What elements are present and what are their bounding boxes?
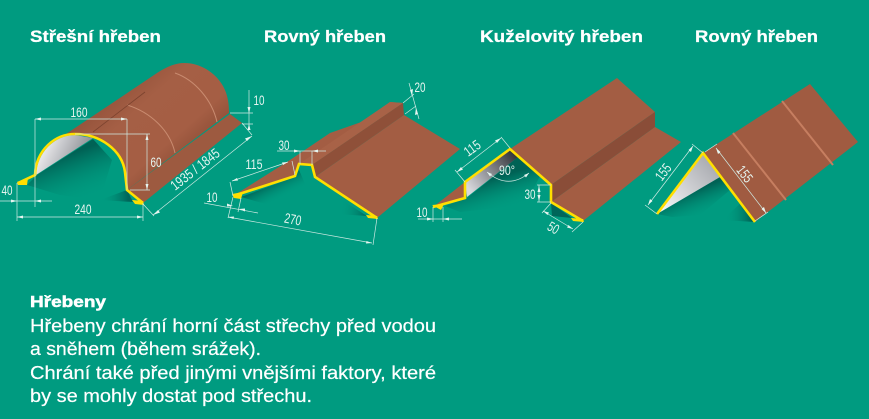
yellow profile — [433, 149, 583, 221]
panel: střešní hřeben diagram — [0, 63, 265, 221]
arrowheads — [648, 146, 766, 213]
yellow profile — [657, 153, 755, 222]
panel: kuželovitý hřeben diagram: 10 — [416, 204, 428, 220]
panel: rovný hřeben diagram 2: 155 — [733, 162, 757, 186]
left wedge — [433, 182, 465, 207]
ground shadow — [445, 157, 540, 212]
panel: střešní hřeben diagram: 240 — [74, 201, 92, 217]
ground shadow — [241, 170, 306, 206]
flange — [551, 127, 681, 221]
body line 1: Hřebeny chrání horní část střechy před vodou — [30, 316, 436, 336]
riser — [551, 112, 655, 202]
panel: střešní hřeben diagram: 10 — [254, 92, 265, 108]
left slope — [233, 102, 403, 196]
ridge side — [312, 103, 404, 177]
dimension lines — [645, 144, 768, 221]
heading: Střešní hřeben: Střešní hřeben — [30, 27, 161, 46]
panel: rovný hřeben diagram: 115 — [246, 156, 263, 172]
labels: 30 — [278, 137, 290, 153]
right slope — [315, 115, 460, 218]
ground shadow — [27, 139, 112, 200]
labels: 155 — [652, 160, 675, 184]
right foot shadow — [722, 203, 755, 222]
profile feet — [232, 192, 378, 219]
panel: střešní hřeben diagram: 60 — [150, 154, 162, 170]
cylinder body — [66, 63, 229, 190]
foot shadow — [100, 190, 133, 202]
yellow profile — [18, 134, 143, 203]
profile feet — [432, 204, 584, 222]
arrowheads — [427, 138, 573, 229]
foot shadow — [551, 203, 572, 218]
panel: kuželovitý hřeben diagram — [416, 78, 681, 237]
text block: Hřebeny description — [30, 294, 436, 406]
panel: rovný hřeben diagram: 270 — [283, 210, 303, 229]
body line 3: Chrání také před jinými vnějšími faktory, které — [30, 363, 436, 383]
subheading: Hřebeny — [30, 294, 106, 311]
flange — [127, 114, 242, 203]
panel: kuželovitý hřeben diagram: 90° — [499, 162, 515, 178]
panel: kuželovitý hřeben diagram: 50 — [545, 218, 562, 237]
arrowheads — [227, 89, 418, 244]
panel: rovný hřeben diagram: 20 — [414, 79, 426, 95]
arrowheads — [11, 107, 252, 218]
labels: 115 — [460, 136, 484, 159]
panel: střešní hřeben diagram: 40 — [2, 182, 13, 198]
dimension lines — [204, 83, 419, 245]
heading: Kuželovitý hřeben: Kuželovitý hřeben — [480, 27, 643, 46]
ribs — [127, 73, 217, 153]
heading: Rovný hřeben 2: Rovný hřeben — [695, 27, 818, 46]
profile feet — [17, 178, 144, 205]
panel: rovný hřeben diagram 2 — [645, 84, 858, 222]
heading: Rovný hřeben: Rovný hřeben — [264, 27, 386, 46]
dimension lines — [0, 90, 253, 221]
ridge seam — [93, 92, 145, 132]
interior — [465, 149, 518, 197]
body line 4: by se mohly dostat pod střechu. — [30, 386, 312, 406]
labels: 160 — [70, 104, 88, 120]
body line 2: a sněhem (během srážek). — [30, 339, 261, 359]
dimension lines — [418, 137, 583, 232]
sheet — [703, 84, 858, 222]
panel: rovný hřeben diagram — [204, 79, 460, 245]
interior — [36, 135, 93, 175]
ridge top — [299, 102, 403, 165]
top slope — [510, 78, 655, 185]
right foot shadow — [337, 200, 367, 216]
panel: střešní hřeben diagram: 1935 / 1845 — [167, 145, 223, 193]
ground shadow — [657, 177, 730, 217]
yellow profile — [233, 164, 377, 218]
panel: kuželovitý hřeben diagram: 30 — [524, 186, 536, 202]
panel: rovný hřeben diagram: 10 — [206, 189, 218, 205]
stripes — [733, 101, 833, 200]
interior — [657, 153, 720, 214]
